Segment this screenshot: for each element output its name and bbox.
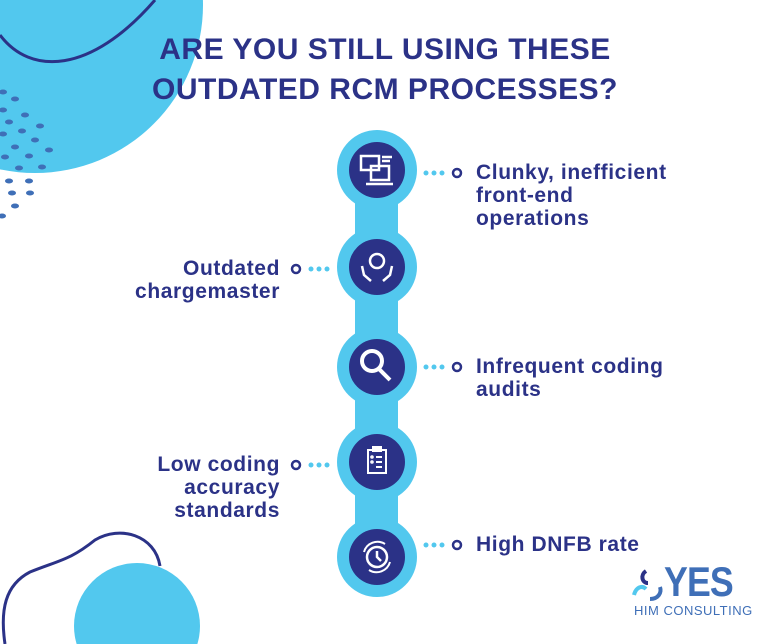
- label 1: front-end: [476, 184, 574, 207]
- label 3: Infrequent coding: [476, 355, 664, 378]
- icon: clipboard: [368, 447, 386, 473]
- label 4: [157, 453, 280, 522]
- label 2: Outdated: [183, 257, 280, 280]
- label 1: operations: [476, 207, 589, 230]
- logo: [632, 560, 753, 618]
- label 1: [476, 161, 667, 230]
- label 2: chargemaster: [135, 280, 280, 303]
- logo: HIM CONSULTING: [634, 603, 753, 618]
- label 3: audits: [476, 378, 541, 401]
- title: [152, 33, 618, 106]
- label 2: [135, 257, 280, 303]
- title: ARE YOU STILL USING THESE: [159, 33, 611, 66]
- label 3: [476, 355, 664, 401]
- label 1: Clunky, inefficient: [476, 161, 667, 184]
- label 4: standards: [174, 499, 280, 522]
- icon: monitors: [361, 156, 393, 184]
- icon: hands gear: [362, 254, 392, 281]
- title: OUTDATED RCM PROCESSES?: [152, 73, 618, 106]
- icon: clock: [364, 542, 390, 572]
- label 4: accuracy: [184, 476, 280, 499]
- label 4: Low coding: [157, 453, 280, 476]
- label 5: High DNFB rate: [476, 533, 640, 556]
- icon: magnifier: [362, 351, 390, 380]
